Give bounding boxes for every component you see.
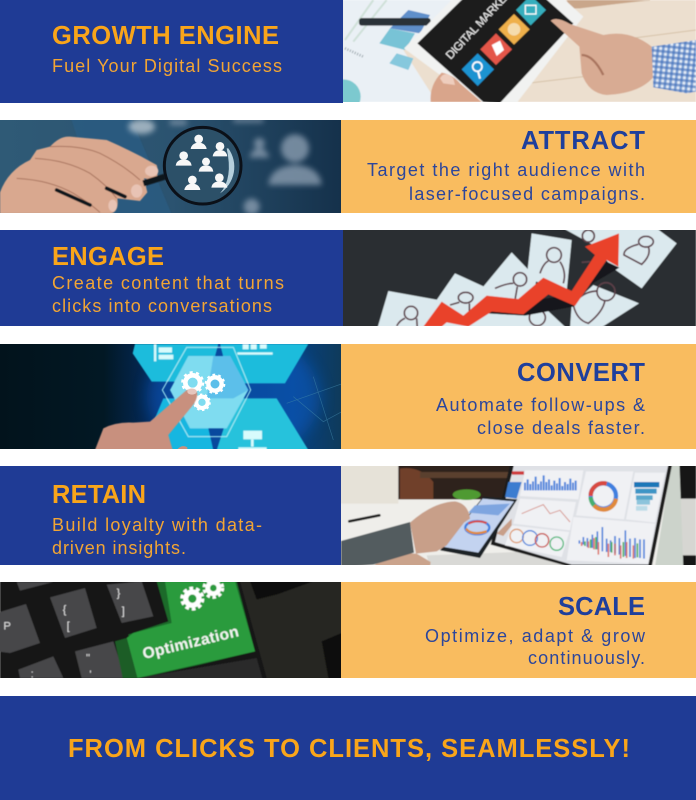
body: engage: Create content that turns: [52, 273, 284, 293]
optimization key label: Optimization: [141, 623, 241, 663]
body: attract: Target the right audience with: [367, 160, 645, 180]
photo: analytics dashboard on laptop and phone: [340, 462, 696, 567]
body: scale: continuously.: [528, 648, 645, 668]
body: convert: Automate follow-ups &: [436, 395, 645, 415]
body: retain: driven insights.: [52, 538, 186, 558]
body: retain: Build loyalty with data-: [52, 515, 262, 535]
body: retain: [52, 515, 262, 558]
photo: red growth arrow over people notes: [340, 225, 696, 330]
panel: convert: [341, 344, 696, 449]
panel: engage: [0, 230, 343, 326]
heading: engage: ENGAGE: [52, 243, 164, 271]
panel: retain: [0, 466, 341, 565]
body: engage: [52, 273, 284, 316]
heading: convert: CONVERT: [517, 359, 645, 387]
body: convert: [436, 395, 645, 438]
keycap legends: ": [86, 652, 90, 664]
heading: retain: RETAIN: [52, 481, 146, 509]
panel: growth engine header: [0, 0, 343, 103]
keycap legends: :: [31, 668, 34, 680]
magnifying lens: [164, 127, 241, 204]
gears: [183, 373, 224, 410]
panel: scale: [341, 582, 696, 678]
panel: attract: [341, 120, 696, 213]
body: scale: Optimize, adapt & grow: [425, 626, 646, 646]
subtitle: Fuel Your Digital Success: [52, 56, 282, 76]
keycap legends: P: [3, 621, 11, 633]
heading: scale: SCALE: [558, 593, 645, 621]
footer banner: [0, 696, 696, 800]
photo: keyboard with optimization key: [0, 578, 345, 681]
photo: magnifying glass over people: [0, 120, 341, 213]
footer tagline: FROM CLICKS TO CLIENTS, SEAMLESSLY!: [68, 735, 630, 763]
body: attract: [367, 160, 645, 204]
photo: finger touching automation gears: [0, 344, 341, 449]
body: scale: [425, 626, 646, 668]
keycap legends: ': [89, 669, 92, 681]
keycap legends: }: [117, 587, 121, 599]
body: engage: clicks into conversations: [52, 296, 272, 316]
keycap legends: {: [63, 604, 67, 616]
heading: attract: ATTRACT: [521, 127, 645, 155]
title: growth engine: GROWTH ENGINE: [52, 22, 279, 50]
body: convert: close deals faster.: [477, 418, 645, 438]
keycap legends: [: [67, 621, 71, 633]
keycap legends: ]: [122, 606, 125, 618]
body: attract: laser-focused campaigns.: [409, 184, 645, 204]
photo: tablet with digital marketing: [343, 0, 696, 102]
keycap legends: [3, 587, 125, 681]
